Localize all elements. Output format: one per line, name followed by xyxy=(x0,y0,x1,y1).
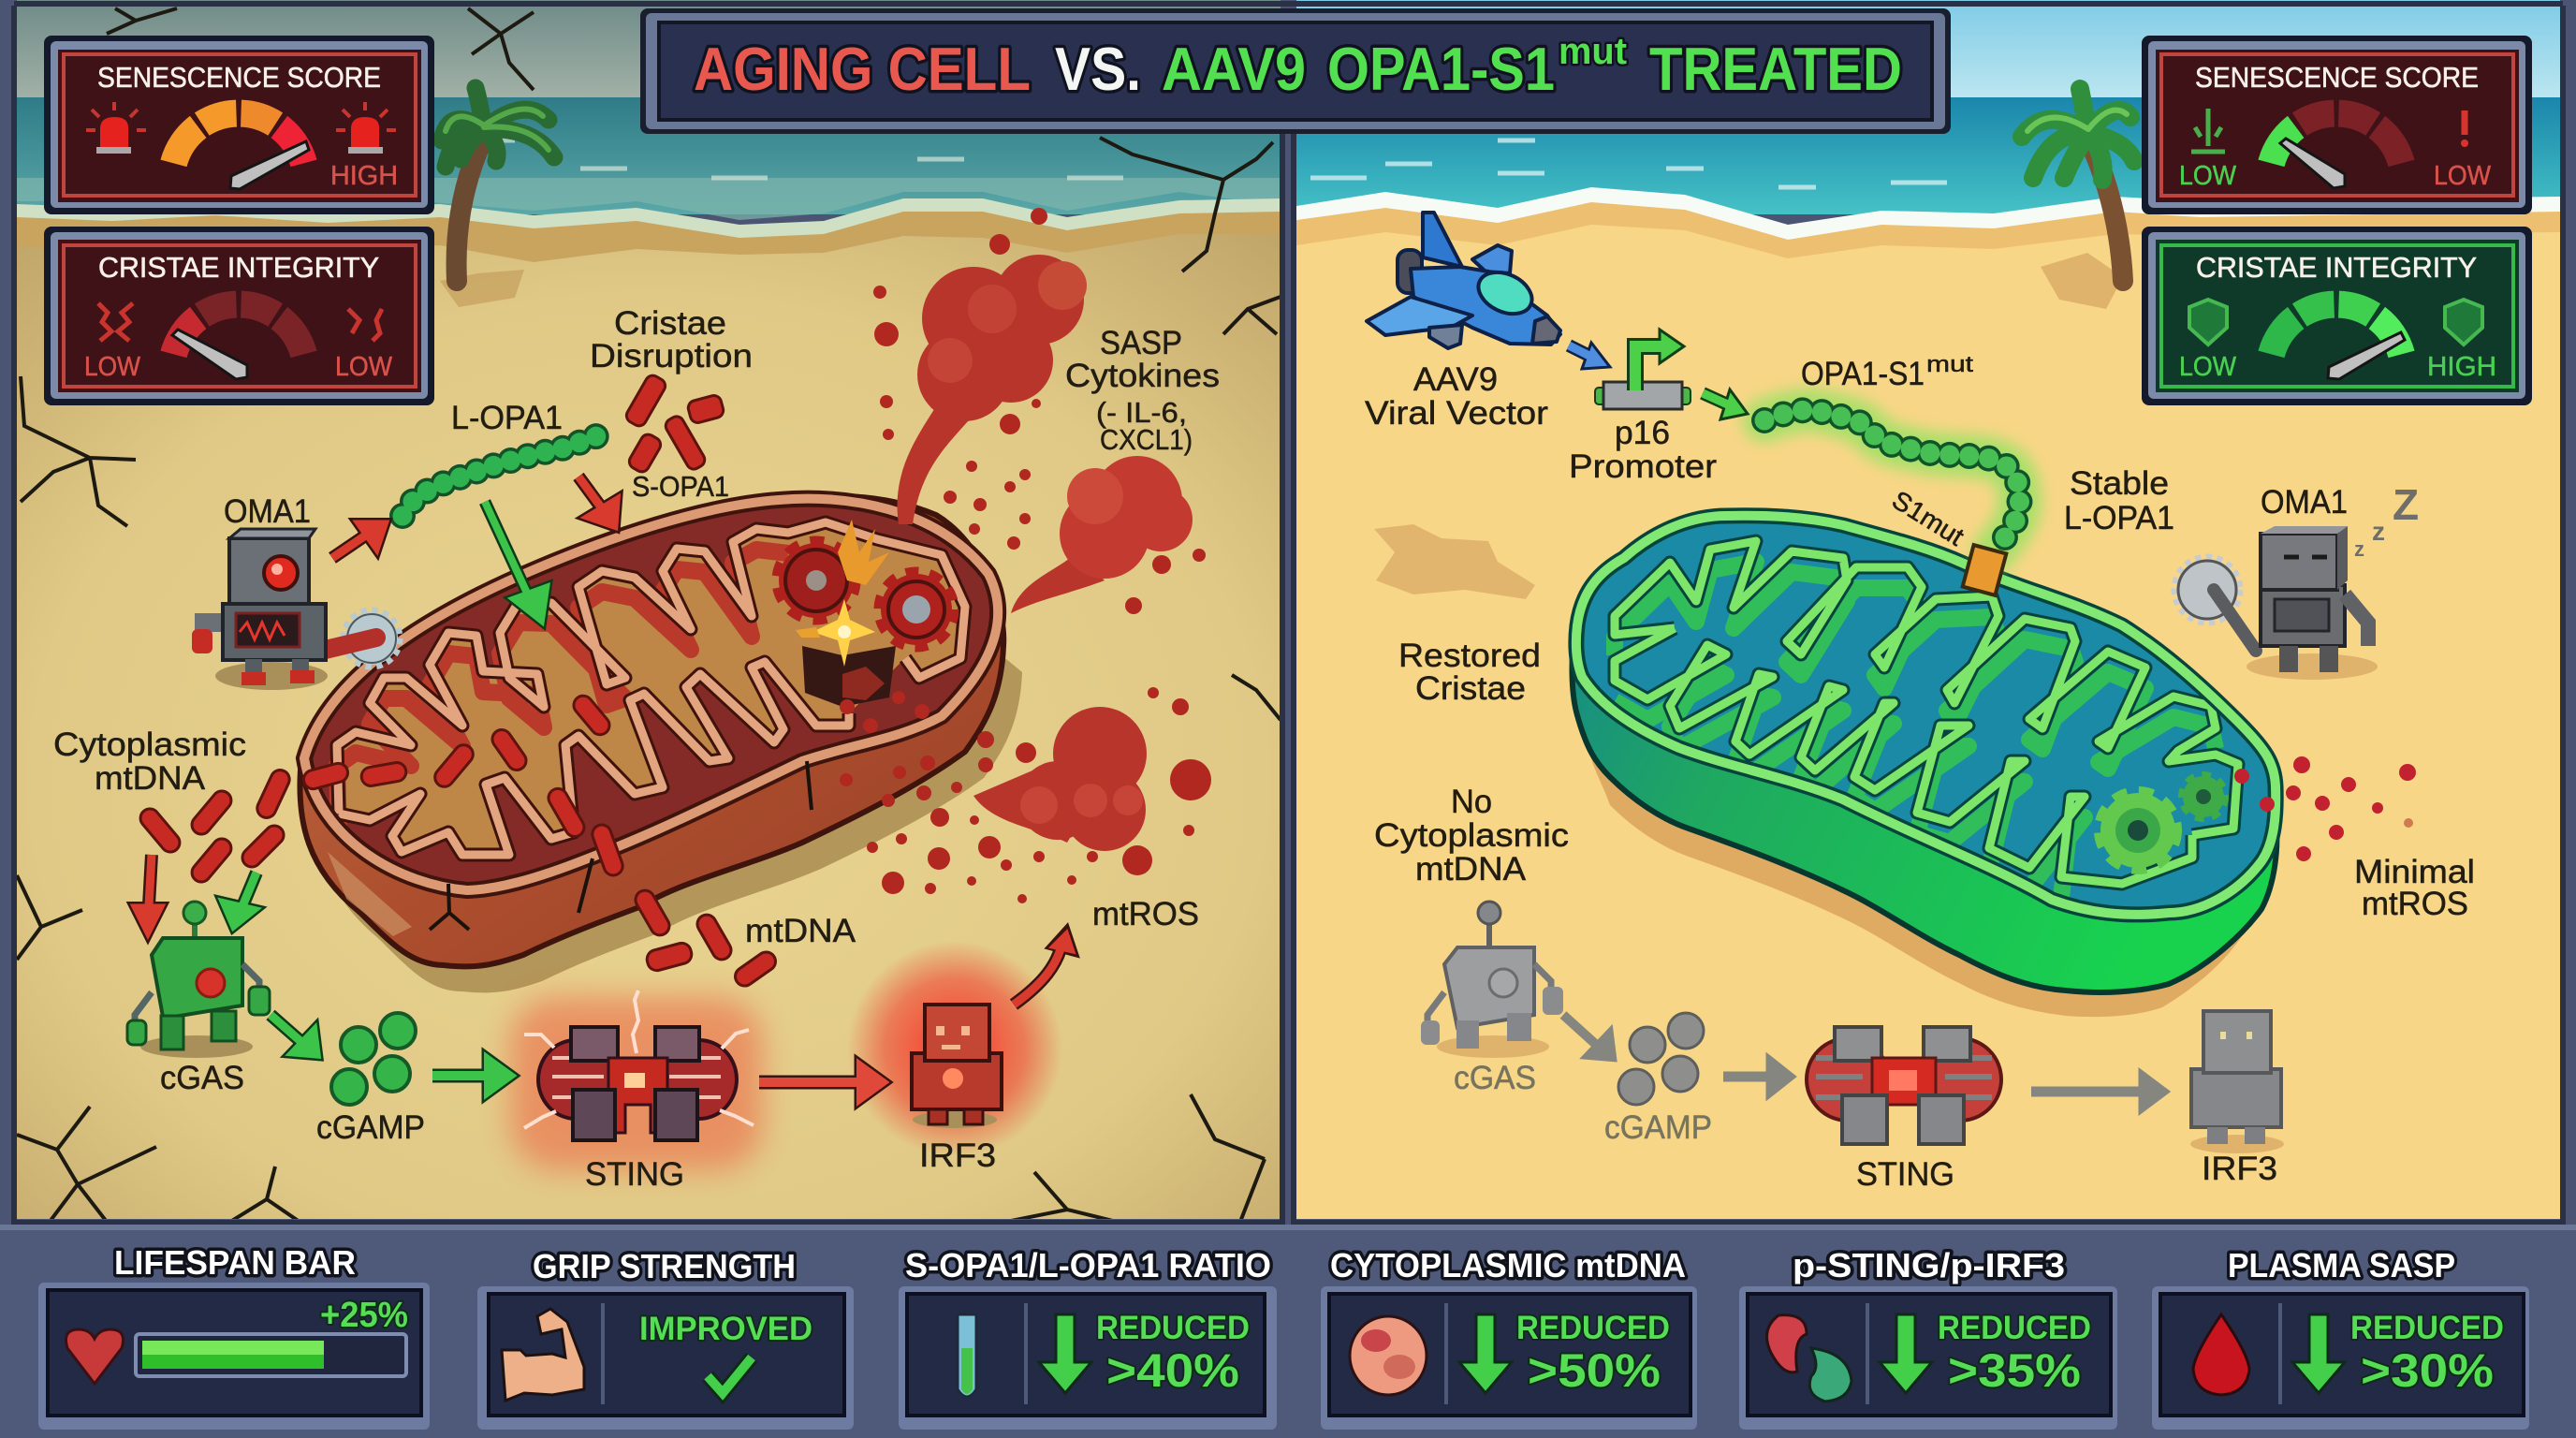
cracks xyxy=(17,8,1281,1222)
label: stable L-OPA1: L-OPA1 xyxy=(2064,500,2174,536)
sleep Z letters: Z xyxy=(2393,480,2419,529)
label: SASP cytokines: (- IL-6, xyxy=(1096,396,1187,429)
label: cGAS: cGAS xyxy=(160,1060,244,1096)
label: cytoplasmic mtDNA: mtDNA xyxy=(95,760,206,797)
arrow: cGAS to cGAMP inactive xyxy=(1563,1015,1612,1057)
label: mtROS: mtROS xyxy=(1092,896,1199,932)
label: p16 promoter: p16 xyxy=(1615,415,1670,451)
stat: grip strength: IMPROVED xyxy=(639,1311,812,1347)
title banner xyxy=(640,8,1951,134)
stat: grip strength xyxy=(477,1247,854,1430)
label: STING: STING xyxy=(585,1156,684,1193)
gauge: cristae integrity right: LOW xyxy=(2179,352,2237,382)
title banner: AAV9 xyxy=(1162,35,1306,103)
label: OMA1: OMA1 xyxy=(224,493,311,530)
title banner: AGING CELL xyxy=(694,35,1031,103)
arrow: to S-OPA1 xyxy=(578,477,616,525)
labels left panel xyxy=(53,305,1220,1193)
arrow: OMA1 to L-OPA1 xyxy=(332,524,384,558)
mtROS dots xyxy=(840,208,1211,903)
label: restored cristae: Cristae xyxy=(1415,670,1526,707)
cGAMP molecules xyxy=(331,1013,416,1105)
gauge: senescence score right xyxy=(2142,36,2532,214)
gauge: cristae integrity right xyxy=(2142,227,2532,405)
label: IRF3: IRF3 xyxy=(919,1137,996,1174)
title banner: VS. xyxy=(1055,35,1141,103)
right mitochondrion xyxy=(1572,516,2276,1017)
sleep Z letters xyxy=(2354,480,2419,561)
label: minimal mtROS xyxy=(2354,854,2475,922)
label: minimal mtROS: Minimal xyxy=(2354,854,2475,890)
p16 promoter icon xyxy=(1595,330,1690,409)
stat: lifespan bar: LIFESPAN BAR xyxy=(114,1243,356,1282)
label: mtDNA: mtDNA xyxy=(745,913,856,949)
stat: S-OPA1/L-OPA1 ratio xyxy=(899,1246,1277,1430)
arrow: IRF3 to mtROS xyxy=(1014,927,1076,1005)
stat: S-OPA1/L-OPA1 ratio: >40% xyxy=(1106,1344,1239,1397)
IRF3 active xyxy=(847,941,1062,1156)
title banner: OPA1-S1 xyxy=(1327,35,1555,103)
label: AAV9 viral vector: AAV9 xyxy=(1413,361,1498,398)
stat: p-STING/p-IRF3: REDUCED xyxy=(1938,1310,2091,1346)
arrow: STING to IRF3 xyxy=(759,1067,882,1097)
label: AAV9 viral vector: Viral Vector xyxy=(1365,395,1548,432)
stat: plasma SASP: REDUCED xyxy=(2350,1310,2504,1346)
label: S-OPA1: S-OPA1 xyxy=(632,470,729,503)
jet: AAV9 viral vector xyxy=(1367,213,1560,348)
arrow: mtDNA to cGAS red xyxy=(137,855,159,931)
label: no cytoplasmic mtDNA: No xyxy=(1451,784,1492,820)
label: restored cristae: Restored xyxy=(1398,638,1541,674)
IRF3 inactive xyxy=(2190,1011,2284,1153)
label: no cytoplasmic mtDNA xyxy=(1374,784,1569,888)
label: minimal mtROS: mtROS xyxy=(2362,886,2468,922)
label: stable L-OPA1 xyxy=(2064,465,2174,536)
label: stable L-OPA1: Stable xyxy=(2070,465,2169,502)
label: SASP cytokines: Cytokines xyxy=(1065,358,1220,394)
sleep Z letters: z xyxy=(2372,517,2385,546)
STING active xyxy=(510,990,763,1170)
arrow: mtDNA to cGAS green xyxy=(225,873,256,925)
stat: S-OPA1/L-OPA1 ratio: REDUCED xyxy=(1096,1310,1250,1346)
robot: cGAS inactive xyxy=(1421,902,1563,1058)
stat: plasma SASP xyxy=(2152,1246,2529,1430)
robot: OMA1 sleeping xyxy=(2176,526,2378,680)
label: SASP cytokines: SASP xyxy=(1100,325,1182,361)
label: OPA1-S1mut: mut xyxy=(1926,352,1973,377)
gauge: senescence score left xyxy=(44,36,434,214)
label: restored cristae xyxy=(1398,638,1541,707)
bottom stats bar xyxy=(0,1225,2576,1438)
label: S1mut: S1mut xyxy=(1887,485,1969,551)
cGAMP inactive molecules xyxy=(1618,1013,1704,1105)
label: OPA1-S1mut: OPA1-S1 xyxy=(1801,356,1925,392)
arrow: cGAMP to STING inactive xyxy=(1723,1063,1789,1091)
minimal mtROS dots xyxy=(2234,756,2416,861)
stat: p-STING/p-IRF3: p-STING/p-IRF3 xyxy=(1793,1246,2065,1284)
sleep Z letters: z xyxy=(2354,537,2364,561)
STING inactive xyxy=(1807,1027,2001,1144)
sand stain xyxy=(1374,524,1535,599)
gauge: senescence score right: LOW xyxy=(2434,161,2492,191)
gauge: cristae integrity left: LOW xyxy=(335,352,393,382)
label: cristae disruption: Cristae xyxy=(614,305,726,342)
stat: plasma SASP: >30% xyxy=(2361,1344,2494,1397)
label: p16 promoter xyxy=(1569,415,1717,485)
OPA1-S1mut chain with glow xyxy=(1764,410,2020,552)
gauge: cristae integrity right: HIGH xyxy=(2427,352,2496,382)
gauge: senescence score right: SENESCENCE SCORE xyxy=(2195,61,2479,94)
stat: lifespan bar: +25% xyxy=(320,1296,408,1335)
stat: S-OPA1/L-OPA1 ratio: S-OPA1/L-OPA1 RATIO xyxy=(905,1246,1271,1284)
stat: lifespan bar xyxy=(38,1243,430,1430)
stat: cytoplasmic mtDNA: REDUCED xyxy=(1516,1310,1670,1346)
label: SASP cytokines xyxy=(1065,325,1220,456)
mtDNA fragments xyxy=(137,692,779,990)
gauge: cristae integrity left: CRISTAE INTEGRITY xyxy=(98,251,379,284)
labels right panel xyxy=(1365,352,2475,1193)
panel: aging cell xyxy=(17,0,1281,1226)
gauge: senescence score left: SENESCENCE SCORE xyxy=(97,61,381,94)
arrow: vector to promoter xyxy=(1569,343,1610,369)
SASP cytokine clouds xyxy=(898,255,1193,851)
gauge: senescence score left: HIGH xyxy=(330,161,398,191)
arrow: promoter to OPA1 xyxy=(1703,389,1748,419)
gauge: cristae integrity right: CRISTAE INTEGRITY xyxy=(2196,251,2477,284)
arrow: cGAMP to STING xyxy=(432,1061,509,1091)
damaged gears and explosion xyxy=(779,520,952,707)
left mitochondrion xyxy=(300,496,1022,992)
arrow: STING to IRF3 inactive xyxy=(2031,1078,2162,1106)
robot: cGAS active xyxy=(127,902,270,1058)
label: cytoplasmic mtDNA: Cytoplasmic xyxy=(53,726,246,763)
stat: cytoplasmic mtDNA: >50% xyxy=(1528,1344,1661,1397)
label: cGAMP: cGAMP xyxy=(316,1109,425,1146)
label: STING inactive: STING xyxy=(1856,1156,1954,1193)
robot: OMA1 active xyxy=(192,529,398,690)
healthy gears xyxy=(2100,776,2224,868)
stat: p-STING/p-IRF3: >35% xyxy=(1948,1344,2081,1397)
L-OPA1 chain xyxy=(402,433,604,516)
stat: grip strength: GRIP STRENGTH xyxy=(533,1247,796,1285)
label: L-OPA1: L-OPA1 xyxy=(451,400,563,436)
stat: plasma SASP: PLASMA SASP xyxy=(2228,1246,2455,1284)
label: SASP cytokines: CXCL1) xyxy=(1100,423,1193,456)
palm tree right xyxy=(2022,89,2134,309)
label: OMA1 sleeping: OMA1 xyxy=(2261,484,2348,521)
label: cristae disruption: Disruption xyxy=(590,338,753,374)
S-OPA1 fragments xyxy=(623,373,724,475)
gauge: cristae integrity left: LOW xyxy=(84,352,141,382)
label: cGAMP inactive: cGAMP xyxy=(1604,1109,1712,1146)
gauge: senescence score right: LOW xyxy=(2179,161,2237,191)
stat: cytoplasmic mtDNA xyxy=(1321,1246,1697,1430)
palm tree left xyxy=(440,88,554,307)
S1mut lock tag xyxy=(1963,545,2006,595)
pathway arrows left xyxy=(137,477,1076,1097)
label: no cytoplasmic mtDNA: Cytoplasmic xyxy=(1374,817,1569,854)
gauge: cristae integrity left xyxy=(44,227,434,405)
panel: treated cell xyxy=(1296,0,2560,1226)
stat: p-STING/p-IRF3 xyxy=(1739,1246,2117,1430)
arrow: L-OPA1 into cristae xyxy=(485,502,546,620)
label: no cytoplasmic mtDNA: mtDNA xyxy=(1415,851,1527,888)
label: p16 promoter: Promoter xyxy=(1569,448,1717,485)
label: cGAS inactive: cGAS xyxy=(1454,1060,1536,1096)
label: cristae disruption xyxy=(590,305,753,374)
label: IRF3 inactive: IRF3 xyxy=(2202,1151,2277,1187)
pathway arrows right xyxy=(1563,1015,2162,1106)
stat: cytoplasmic mtDNA: CYTOPLASMIC mtDNA xyxy=(1330,1246,1686,1284)
label: AAV9 viral vector xyxy=(1365,361,1548,432)
title banner: TREATED xyxy=(1649,35,1902,103)
title banner: mut xyxy=(1559,31,1627,72)
arrow: cGAS to cGAMP xyxy=(271,1015,316,1054)
label: cytoplasmic mtDNA xyxy=(53,726,246,797)
